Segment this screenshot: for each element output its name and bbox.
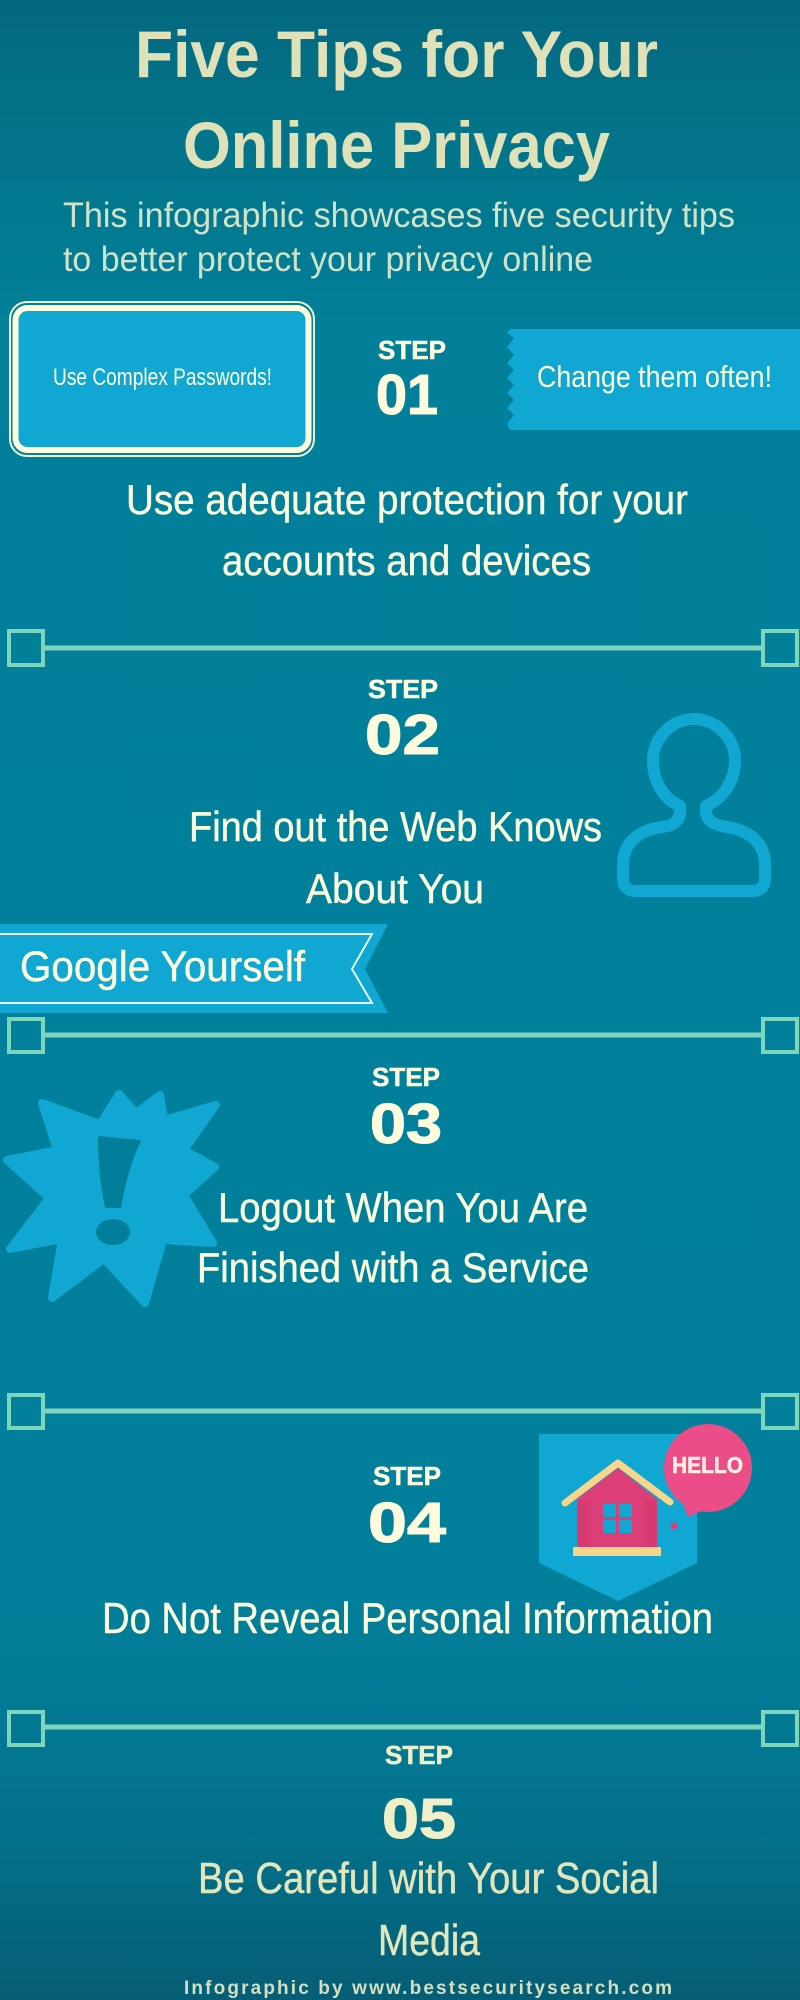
step 01 label: 01 [376, 363, 438, 427]
title: Online Privacy [183, 108, 610, 182]
icon: house with hello bubble: HELLO [672, 1452, 743, 1478]
step 05 description: Media [378, 1916, 480, 1965]
step 05 label: STEP [385, 1740, 453, 1770]
step 03 label: 03 [370, 1092, 442, 1156]
divider 4 [9, 1712, 797, 1745]
step 01 label [376, 335, 446, 427]
title: Five Tips for Your [135, 17, 658, 91]
step 01 description: Use adequate protection for your [126, 476, 688, 523]
step 05 description [198, 1854, 659, 1965]
panel: use complex passwords [10, 302, 314, 456]
step 02 label: 02 [365, 703, 440, 767]
step 01 label: STEP [378, 335, 446, 365]
step 01 description: accounts and devices [222, 537, 591, 584]
step 02 description: Find out the Web Knows [189, 803, 602, 850]
icon: person outline [623, 719, 765, 891]
step 03 description: Logout When You Are [218, 1184, 588, 1231]
step 04 label: 04 [368, 1491, 446, 1555]
divider 2 [9, 1019, 797, 1052]
step 02 description [189, 803, 602, 912]
footer credit: Infographic by www.bestsecuritysearch.com [184, 1978, 672, 1999]
step 03 description: Finished with a Service [197, 1244, 589, 1291]
ribbon: google yourself: Google Yourself [20, 943, 306, 991]
step 04 label [368, 1461, 446, 1555]
step 02 label [365, 674, 440, 767]
ribbon: change them often [507, 329, 800, 430]
divider 3 [9, 1395, 797, 1428]
subtitle: This infographic showcases five security tips [63, 196, 735, 235]
step 01 description [126, 476, 688, 584]
step 03 label [370, 1062, 442, 1156]
step 04 description: Do Not Reveal Personal Information [102, 1594, 713, 1643]
panel: use complex passwords: Use Complex Passwords! [53, 364, 272, 391]
subtitle: to better protect your privacy online [63, 240, 593, 279]
step 05 description: Be Careful with Your Social [198, 1854, 659, 1903]
title [135, 17, 658, 182]
icon: exclamation starburst [7, 1094, 216, 1303]
divider 1 [9, 631, 797, 665]
step 02 label: STEP [368, 674, 438, 704]
step 02 description: About You [306, 865, 484, 912]
ribbon: google yourself [0, 924, 388, 1013]
subtitle [63, 196, 735, 279]
step 04 label: STEP [373, 1461, 441, 1491]
step 03 label: STEP [372, 1062, 440, 1092]
step 05 label [382, 1740, 456, 1851]
step 03 description [197, 1184, 589, 1291]
icon: house with hello bubble [539, 1424, 752, 1601]
step 05 label: 05 [382, 1787, 456, 1851]
